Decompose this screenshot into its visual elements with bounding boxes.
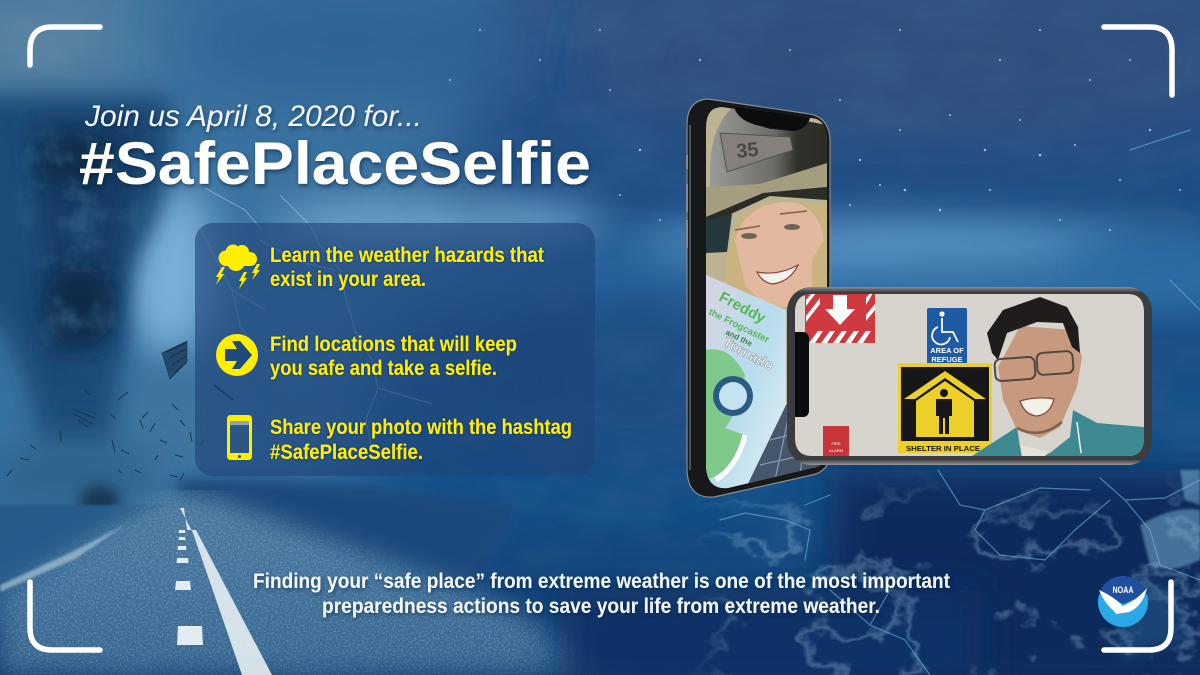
step 2: text: Find locations that will keep [270, 332, 517, 356]
step 1: icon storm cloud [216, 244, 260, 289]
logo: NOAA [1098, 576, 1148, 627]
tornado funnel [0, 90, 200, 518]
corner frame: bottom right [1104, 582, 1171, 650]
camera lens [713, 376, 753, 416]
step 3: text: #SafePlaceSelfie. [270, 440, 423, 464]
step 2: text: you safe and take a selfie. [270, 356, 497, 380]
corner frame: top left [30, 27, 100, 65]
man in teal shirt [972, 297, 1144, 458]
heading: date line: Join us April 8, 2020 for... [84, 100, 422, 133]
step 3: text: Share your photo with the hashtag [270, 415, 572, 439]
notch [795, 332, 809, 417]
closing statement: Finding your “safe place” from extreme weather is one of the most important [253, 569, 950, 593]
hair [726, 203, 827, 310]
step 3: text [270, 415, 572, 464]
helmet: 35 [735, 139, 760, 163]
sign: area of refuge: REFUGE [931, 355, 963, 364]
notch [734, 107, 810, 131]
sign: red arrow [805, 293, 875, 343]
book [706, 275, 786, 490]
step 1: text: Learn the weather hazards that [270, 243, 544, 267]
flying debris [7, 341, 233, 480]
step 1: text [270, 243, 544, 291]
book title: Tornado [721, 334, 777, 373]
phone: horizontal selfie with shelter signs [787, 287, 1152, 465]
sign: area of refuge [927, 308, 967, 364]
lightning [200, 188, 432, 450]
left side light haze [0, 0, 500, 560]
helmet [706, 107, 827, 225]
book title: the Frogcaster [707, 307, 771, 346]
heading: hashtag title: #SafePlaceSelfie [79, 130, 591, 197]
corner frame: bottom left [30, 582, 100, 650]
sign: fire alarm: FIRE [831, 441, 841, 446]
sign: fire alarm [823, 426, 849, 456]
panel: three steps [195, 223, 595, 476]
book title [709, 291, 772, 370]
face [735, 202, 825, 308]
phone: vertical selfie with firefighter helmet [686, 99, 835, 500]
sign: shelter in place [898, 363, 992, 453]
step 3: icon smartphone [227, 415, 252, 460]
sign: area of refuge: AREA OF [930, 346, 964, 355]
step 2: icon arrow in circle [216, 334, 258, 376]
sign: fire alarm: ALARM [829, 448, 843, 453]
water [830, 470, 1200, 675]
glow behind tornado [122, 180, 218, 360]
corner frame: top right [1104, 27, 1172, 95]
closing statement: preparedness actions to save your life from extreme weather. [322, 594, 880, 618]
sign: shelter in place: SHELTER IN PLACE [906, 444, 980, 453]
book title: Freddy [716, 289, 769, 327]
plaid shirt [748, 404, 820, 483]
stars [449, 29, 1181, 231]
step 2: text [270, 332, 517, 380]
closing statement [253, 569, 950, 618]
logo: NOAA: NOAA [1112, 585, 1134, 595]
step 1: text: exist in your area. [270, 267, 426, 291]
book title: and the [724, 328, 754, 349]
road scene [0, 478, 660, 675]
